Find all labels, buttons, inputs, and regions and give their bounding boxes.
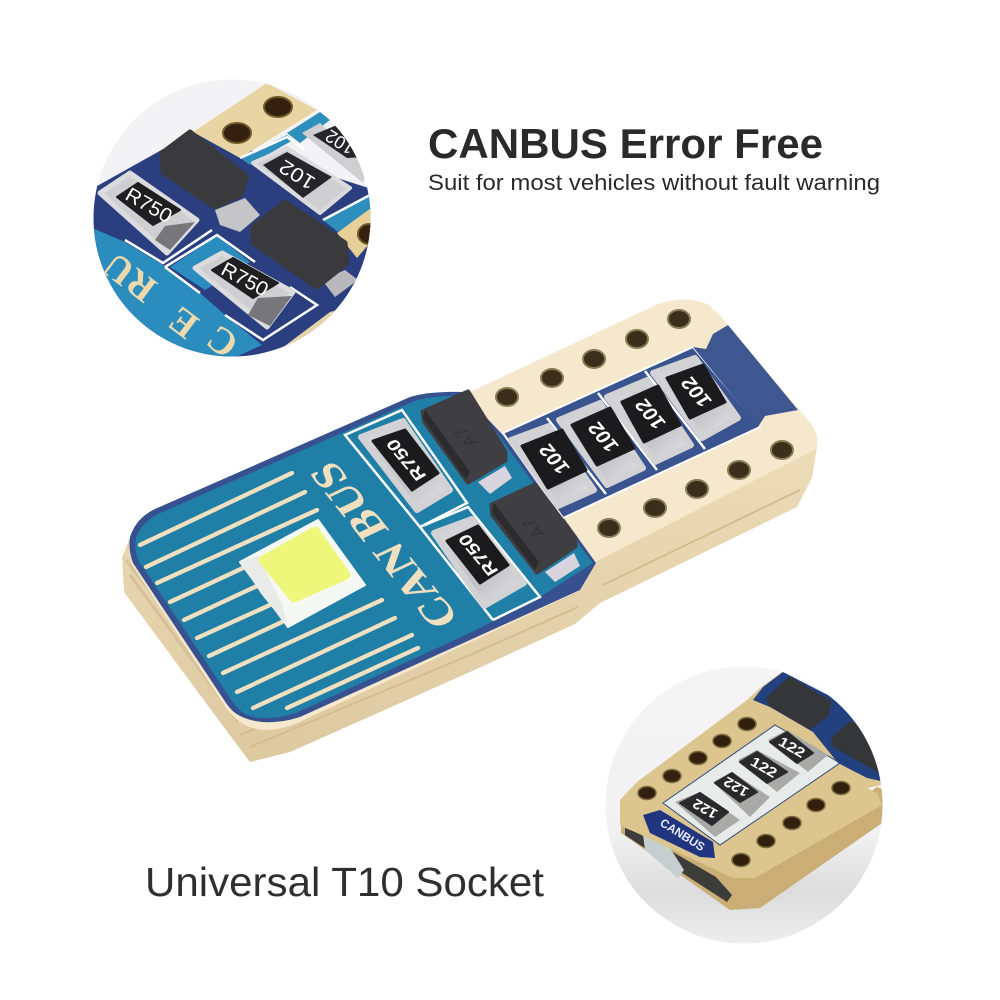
- resistor partial: [302, 123, 367, 183]
- light plate: [663, 725, 840, 845]
- resistor 122: 122: [748, 753, 780, 781]
- resistor cell outlines: [345, 410, 540, 620]
- board side edge: [122, 447, 817, 762]
- resistor 122: 122: [690, 795, 720, 822]
- title: CANBUS Error Free: [428, 120, 823, 167]
- diode: [253, 202, 347, 287]
- mounting holes: [496, 310, 793, 537]
- silkscreen outlines: [125, 137, 370, 340]
- gold pad bottom: [284, 310, 335, 346]
- resistor R750: [100, 173, 197, 253]
- diode: [423, 392, 512, 494]
- diode: A7: [518, 515, 550, 541]
- holes: [223, 97, 380, 244]
- CAN BUS silkscreen: CAN BUS: [300, 455, 469, 635]
- LED front: [643, 835, 684, 878]
- resistor R750: [195, 253, 293, 327]
- holes: [638, 718, 850, 866]
- resistor 102: 102: [631, 395, 671, 432]
- diode: [832, 722, 879, 773]
- diode: [768, 678, 830, 728]
- resistor 122: [675, 792, 740, 837]
- silkscreen letters: RU: [95, 244, 165, 310]
- subtitle: Suit for most vehicles without fault warning: [428, 170, 880, 195]
- teal slivers: [240, 112, 375, 232]
- cell dividers: [547, 371, 705, 494]
- resistor R750: R750: [382, 436, 431, 484]
- resistor R750: [434, 519, 524, 606]
- resistor partial: 102: [322, 126, 358, 158]
- resistor 102: 102: [535, 440, 575, 477]
- diode: [492, 485, 580, 582]
- detail circle: top left: C: [199, 316, 246, 366]
- teal panel: [135, 396, 593, 718]
- LED chip: [240, 520, 365, 627]
- detail circle: top left: E: [161, 298, 206, 347]
- resistor 102: [511, 426, 594, 506]
- teal board: [90, 227, 262, 362]
- diode: [162, 132, 247, 207]
- LED gap: [625, 828, 732, 902]
- resistor 122: [768, 730, 828, 772]
- resistor R750: R750: [454, 531, 503, 579]
- blue solder mask: [129, 392, 596, 722]
- resistor 102: 102: [276, 155, 319, 194]
- resistor R750: R750: [217, 258, 272, 301]
- resistor 102: 102: [677, 373, 717, 410]
- solder joint: [215, 198, 260, 232]
- resistor 122: [713, 772, 770, 817]
- resistor R750: R750: [121, 184, 176, 228]
- resistor 122: [738, 750, 800, 792]
- resistor 102: [253, 148, 350, 213]
- resistor 102: [653, 358, 738, 438]
- resistor 102: [607, 380, 691, 462]
- caption: socket: Universal T10 Socket: [145, 859, 545, 905]
- CANBUS tag: CANBUS: [658, 816, 707, 854]
- dark blue board: [90, 132, 375, 360]
- dark blue pads: [753, 672, 890, 783]
- heat-sink traces: [140, 473, 418, 708]
- detail circle: bottom right: [600, 660, 890, 950]
- resistor 122: 122: [776, 733, 808, 761]
- main LED board: [122, 300, 817, 762]
- resistor 102: 102: [584, 418, 624, 455]
- CANBUS tag: [643, 810, 715, 858]
- board top surface: [129, 300, 817, 730]
- blue end pad: [693, 325, 798, 427]
- resistor 102: [559, 403, 643, 485]
- blue resistor strip: [503, 347, 760, 518]
- diode: A7: [450, 424, 482, 450]
- gold pad top: [193, 83, 317, 158]
- resistor R750: [361, 421, 450, 510]
- detail circle: top left: [90, 75, 380, 366]
- board top: [620, 672, 890, 878]
- gold pad right: [337, 208, 370, 258]
- solder joint: [325, 270, 356, 297]
- board side: [621, 787, 884, 910]
- teal cell corner: [170, 236, 250, 290]
- resistor 122: 122: [721, 773, 751, 800]
